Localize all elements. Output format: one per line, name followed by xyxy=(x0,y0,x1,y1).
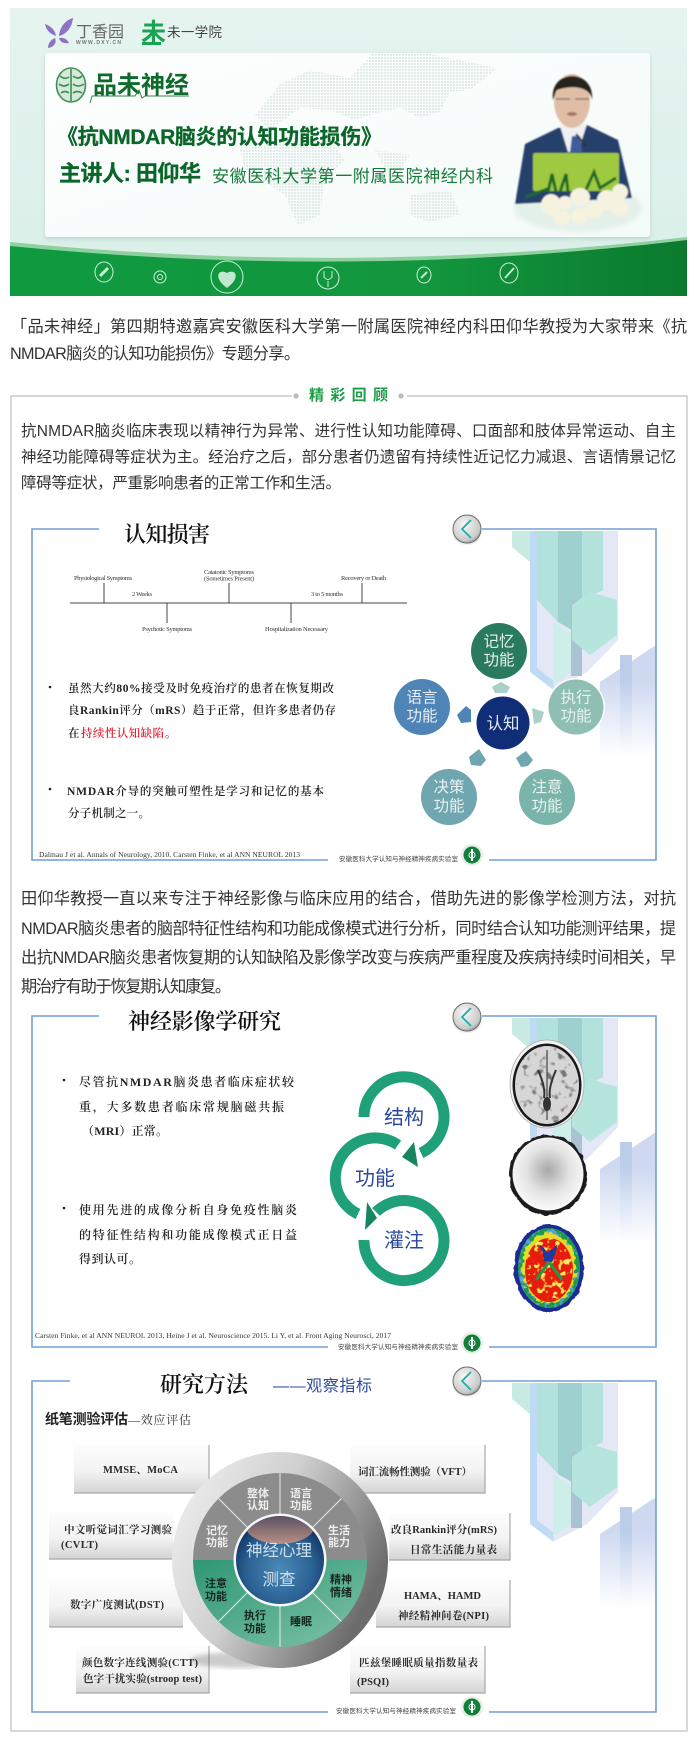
node: language xyxy=(394,679,450,735)
box: CVLT: 中文听觉词汇学习测验 xyxy=(64,1523,172,1536)
lab footer: 安徽医科大学认知与神经精神疾病实验室 xyxy=(339,854,458,863)
citation: Dalmau J et al. Annals of Neurology, 2010. Carsten Finke, et al ANN NEUROL 2013 xyxy=(39,850,300,859)
paragraph: clinical presentation: 神经功能障碍等症状为主。经治疗之后，部分患者仍遗留有持续性近记忆力减退、言语情景记忆 xyxy=(21,448,676,466)
sector labels: 精神 xyxy=(330,1572,352,1586)
slide: neuroimaging research xyxy=(32,1003,656,1354)
timeline: Catatonic Symptoms xyxy=(204,569,254,576)
lab footer xyxy=(339,844,483,866)
box: DST: 数字广度测试(DST) xyxy=(70,1598,164,1611)
paragraph: imaging research: 期治疗有助于恢复期认知康复。 xyxy=(21,978,231,996)
slide title: 认知损害 xyxy=(124,522,210,547)
brain icon xyxy=(56,68,86,102)
box: PSQI: (PSQI) xyxy=(357,1677,390,1688)
bullet text: 的特征性结构和功能成像模式正日益 xyxy=(79,1227,297,1242)
sector labels: 功能 xyxy=(290,1498,312,1512)
bullet text: 良Rankin评分（mRS）趋于正常，但许多患者仍存 xyxy=(68,703,336,717)
lab footer xyxy=(336,1696,483,1718)
node: executive xyxy=(547,678,605,736)
node: decision: 决策 xyxy=(433,778,465,796)
box: NPI: 神经精神问卷(NPI) xyxy=(398,1609,490,1622)
sector labels: 执行 xyxy=(244,1608,266,1622)
logo text: DXY: 丁香园 xyxy=(76,23,124,41)
box: mRS xyxy=(389,1513,510,1560)
lab footer xyxy=(338,1332,483,1354)
box: MMSE: MMSE、MoCA xyxy=(103,1465,178,1476)
node: memory xyxy=(471,623,527,679)
bullet text: 分子机制之一。 xyxy=(68,806,150,820)
box: VFT: 词汇流畅性测验（VFT） xyxy=(358,1465,472,1478)
logo: DXY butterfly xyxy=(45,18,73,48)
bullet text: 持续性认知缺陷 xyxy=(81,726,164,740)
centre ball: 神经心理 xyxy=(246,1541,312,1560)
box: CVLT: (CVLT) xyxy=(61,1540,98,1551)
paragraph: imaging research: 田仰华教授一直以来专注于神经影像与临床应用的结合，借助先进的影像学检测方法，对抗 xyxy=(21,889,676,908)
wheel diagram xyxy=(172,1452,388,1668)
timeline: (Sometimes Present) xyxy=(204,576,254,582)
node: cognition centre: 认知 xyxy=(486,714,520,733)
timeline: Recovery or Death xyxy=(341,575,387,582)
section label: —效应评估 xyxy=(127,1412,191,1427)
box: CTT xyxy=(76,1646,209,1693)
lab footer: 安徽医科大学认知与神经精神疾病实验室 xyxy=(336,1706,456,1715)
slide title xyxy=(160,1372,372,1397)
box: NPI xyxy=(376,1580,510,1627)
bullet text: 尽管抗NMDAR脑炎患者临床症状较 xyxy=(79,1074,295,1089)
intro paragraph: 「品未神经」第四期特邀嘉宾安徽医科大学第一附属医院神经内科田仰华教授为大家带来《抗 xyxy=(11,318,687,336)
paragraph: clinical presentation xyxy=(21,422,676,492)
node: language: 功能 xyxy=(406,707,438,725)
slide: research methods xyxy=(32,1367,656,1718)
section label xyxy=(45,1411,191,1427)
sector labels: 能力 xyxy=(328,1535,350,1549)
sector labels: 功能 xyxy=(205,1589,227,1603)
ring: function xyxy=(335,1138,398,1230)
test boxes xyxy=(49,1445,510,1693)
node: attention xyxy=(519,769,575,825)
centre ball xyxy=(234,1506,326,1606)
node: executive: 执行 xyxy=(560,688,592,706)
arrows to outer nodes xyxy=(457,682,544,767)
intro paragraph xyxy=(10,318,687,363)
panel: highlights xyxy=(11,385,687,1731)
node: cognition centre xyxy=(475,695,531,751)
slide frame xyxy=(32,1381,656,1712)
box: CTT: 颜色数字连线测验(CTT) xyxy=(82,1656,198,1669)
timeline xyxy=(70,569,407,633)
photo: speaker at podium xyxy=(514,74,642,232)
sector labels: 情绪 xyxy=(330,1585,352,1599)
box: mRS: 改良Rankin评分(mRS) xyxy=(391,1523,498,1536)
sector labels: 语言 xyxy=(290,1486,312,1500)
ring: perfusion: 灌注 xyxy=(384,1229,424,1252)
MRI scan: functional xyxy=(509,1135,587,1215)
slide title: 研究方法 xyxy=(160,1372,249,1397)
sector labels: 记忆 xyxy=(206,1523,228,1537)
sector labels: 整体 xyxy=(247,1486,269,1500)
sector labels: 睡眠 xyxy=(290,1615,312,1628)
bullet text: 虽然大约80%接受及时免疫治疗的患者在恢复期改 xyxy=(68,681,334,695)
bullet text: 在 xyxy=(68,726,80,740)
panel heading: 精彩回顾 xyxy=(309,386,388,404)
sector labels: 生活 xyxy=(328,1523,350,1537)
node: attention: 功能 xyxy=(531,797,563,815)
timeline: 2 Weeks xyxy=(132,591,152,598)
ring diagram xyxy=(335,1077,444,1281)
box: CVLT xyxy=(49,1512,173,1559)
MRI scan: perfusion xyxy=(514,1224,584,1312)
brand heading: 品未神经 xyxy=(93,72,189,99)
logo: Weiyi academy: 未 xyxy=(141,19,166,47)
sector labels xyxy=(205,1486,352,1635)
white presentation card xyxy=(45,52,650,239)
icon row xyxy=(95,261,518,293)
slide frame xyxy=(32,529,656,860)
paragraph: clinical presentation: 抗NMDAR脑炎临床表现以精神行为异常、进行性认知功能障碍、口面部和肢体异常运动、自主 xyxy=(21,422,676,440)
box: MMSE xyxy=(74,1445,209,1493)
decorative tech background xyxy=(505,531,656,770)
box: DST xyxy=(49,1580,183,1627)
cycle diagram xyxy=(394,623,605,825)
ring: structure xyxy=(364,1077,444,1167)
intro paragraph: NMDAR脑炎的认知功能损伤》专题分享。 xyxy=(10,345,300,363)
sector labels: 功能 xyxy=(244,1621,266,1635)
bullet text: NMDAR介导的突触可塑性是学习和记忆的基本 xyxy=(67,784,324,798)
node: decision: 功能 xyxy=(433,797,465,815)
centre ball: 测查 xyxy=(262,1570,296,1589)
box: PSQI xyxy=(350,1646,485,1693)
sector labels: 注意 xyxy=(205,1576,227,1590)
timeline: Hospitalization Necessary xyxy=(265,626,329,633)
world map dots xyxy=(240,52,498,226)
bullet text: 得到认可。 xyxy=(79,1251,141,1266)
MRI scan: structural xyxy=(510,1040,584,1128)
bullet text: 重，大多数患者临床常规脑磁共振 xyxy=(79,1099,284,1114)
bullet text: （MRI）正常。 xyxy=(82,1123,168,1138)
slide title: ——观察指标 xyxy=(273,1377,372,1395)
timeline: Physiological Symptoms xyxy=(74,575,132,582)
decorative tech background xyxy=(505,1018,656,1257)
speaker name: 主讲人: 田仰华 xyxy=(59,161,201,186)
ring: structure: 结构 xyxy=(384,1106,424,1129)
logo: Weiyi academy xyxy=(141,19,222,47)
slide title: 神经影像学研究 xyxy=(128,1009,281,1034)
timeline: Psychotic Symptoms xyxy=(142,626,192,633)
citation: Carsten Finke, et al ANN NEUROL 2013, Heine J et al. Neuroscience 2015. Li Y, et al. Front Aging Neurosci, 2017 xyxy=(35,1331,391,1340)
logo: Weiyi academy: 未一学院 xyxy=(167,25,222,40)
back button xyxy=(453,1003,481,1032)
paragraph: clinical presentation: 障碍等症状，严重影响患者的正常工作和生活。 xyxy=(21,474,341,492)
banner xyxy=(10,8,687,296)
bullet text xyxy=(63,1074,298,1266)
bullet text: 。 xyxy=(165,728,176,740)
green wave footer xyxy=(10,237,687,296)
timeline: 3 to 5 months xyxy=(311,591,343,598)
node: memory: 功能 xyxy=(483,651,515,669)
bullet text xyxy=(49,681,336,820)
paragraph: imaging research: 出抗NMDAR脑炎患者恢复期的认知缺陷及影像学改变与疾病严重程度及疾病持续时间相关，早 xyxy=(21,949,676,967)
node: decision xyxy=(421,769,477,825)
box: CTT: 色字干扰实验(stroop test) xyxy=(83,1672,202,1685)
lab footer: 安徽医科大学认知与神经精神疾病实验室 xyxy=(338,1342,458,1351)
sector labels: 功能 xyxy=(206,1535,228,1549)
slide frame xyxy=(32,1016,656,1347)
back button xyxy=(453,515,481,544)
box: mRS: 日常生活能力量表 xyxy=(410,1543,498,1556)
section label: 纸笔测验评估 xyxy=(45,1411,128,1427)
node: language: 语言 xyxy=(406,688,438,706)
ring: function: 功能 xyxy=(355,1167,395,1190)
speaker affiliation: 安徽医科大学第一附属医院神经内科 xyxy=(212,167,493,186)
paragraph: imaging research xyxy=(21,889,676,996)
box: VFT xyxy=(350,1445,485,1493)
node: memory: 记忆 xyxy=(483,632,515,650)
node: attention: 注意 xyxy=(531,777,563,796)
node: executive: 功能 xyxy=(560,707,592,725)
box: PSQI: 匹兹堡睡眠质量指数量表 xyxy=(359,1656,478,1669)
paragraph: imaging research: NMDAR脑炎患者的脑部特征性结构和功能成像模式进行分析，同时结合认知功能测评结果，提 xyxy=(21,920,676,938)
sector labels: 认知 xyxy=(247,1498,269,1512)
logo text: DXY: WWW.DXY.CN xyxy=(76,40,121,46)
decorative tech background xyxy=(505,1383,656,1622)
bullet text: 使用先进的成像分析自身免疫性脑炎 xyxy=(79,1202,298,1217)
box: NPI: HAMA、HAMD xyxy=(404,1591,481,1602)
talk title: 《抗NMDAR脑炎的认知功能损伤》 xyxy=(57,125,382,149)
back button xyxy=(453,1367,481,1396)
slide: cognitive impairment xyxy=(32,515,656,866)
ring: perfusion xyxy=(364,1201,444,1281)
